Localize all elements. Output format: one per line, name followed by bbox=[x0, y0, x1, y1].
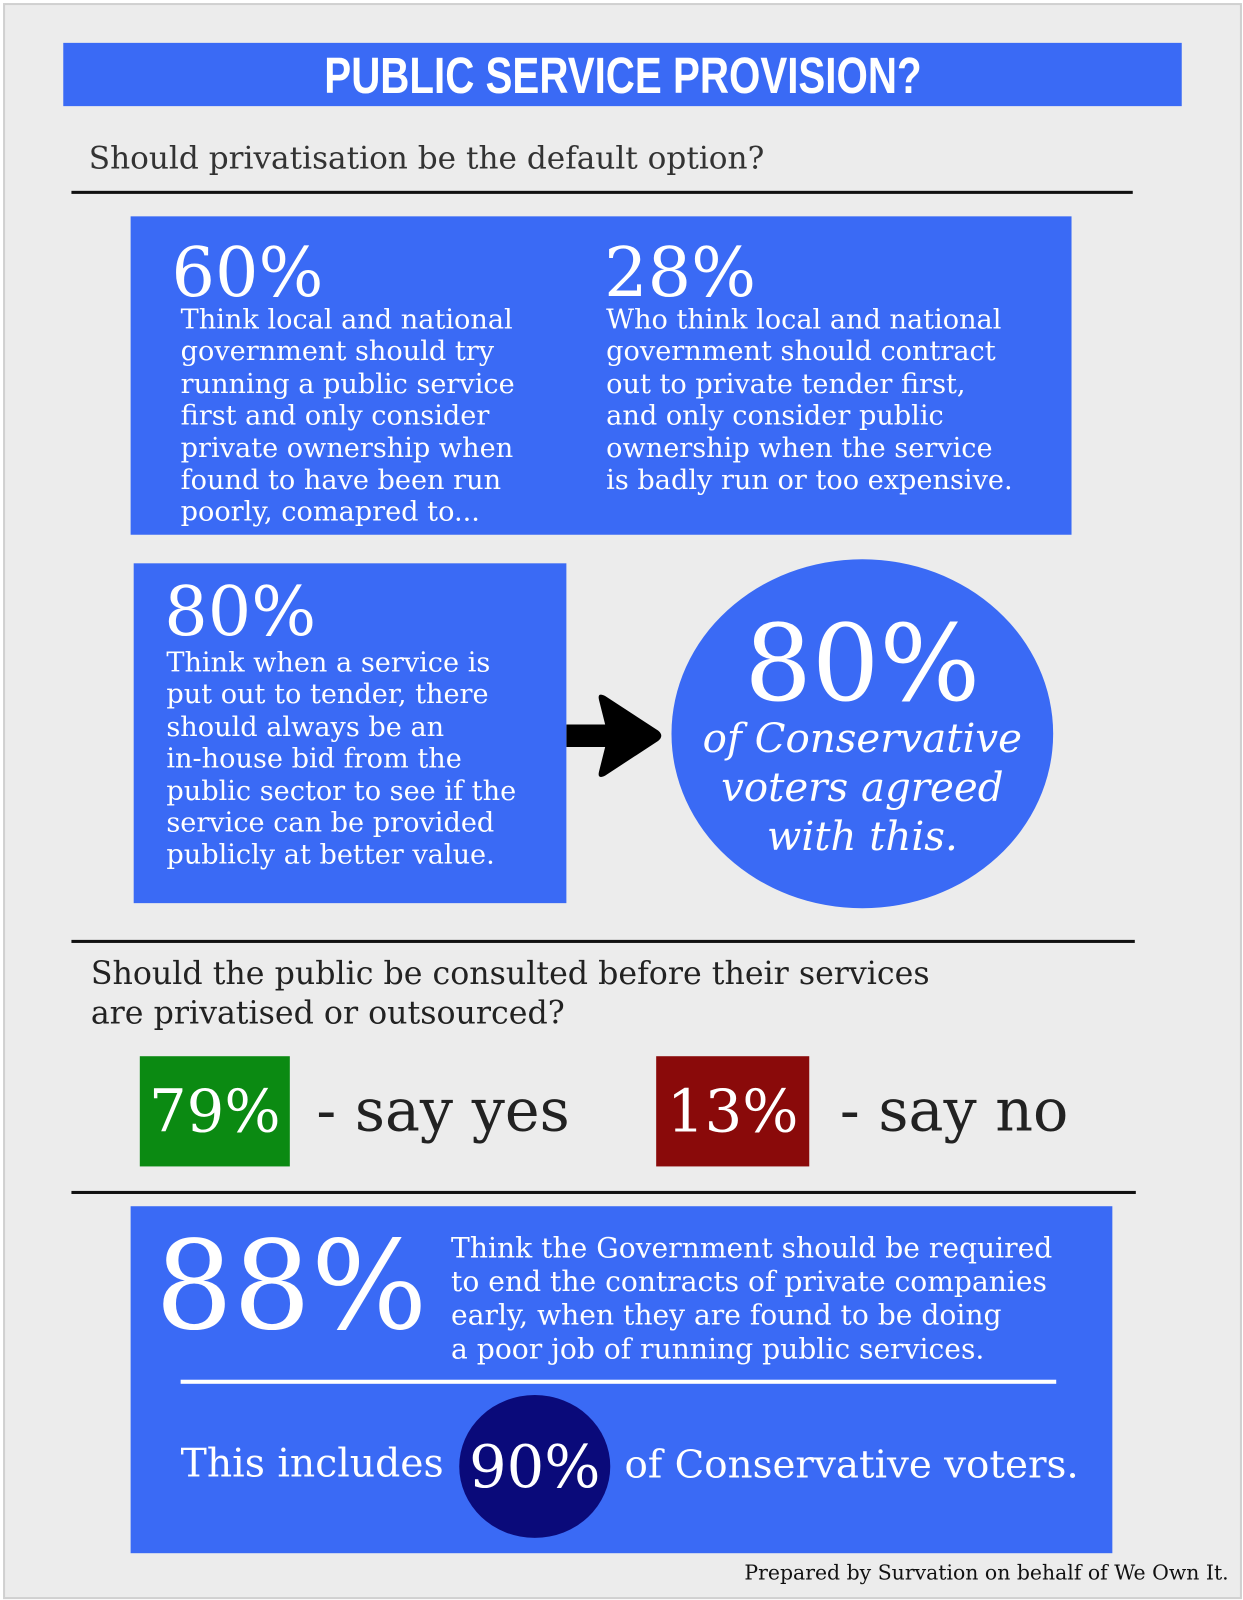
conservative voters line: of Conservative voters. bbox=[625, 1442, 1079, 1487]
stat 60%: first and only consider bbox=[181, 400, 489, 432]
panel: 80% in-house bid: in-house bid from the bbox=[166, 743, 462, 775]
stat 60%: 60% bbox=[171, 233, 323, 312]
stat 60%: private ownership when bbox=[181, 432, 513, 464]
stat: 13% no: - say no bbox=[840, 1077, 1068, 1145]
arrow bbox=[566, 694, 662, 777]
stat: 13% no bbox=[656, 1056, 1068, 1166]
panel: 80% in-house bid: put out to tender, there bbox=[166, 679, 489, 711]
stat 28%: and only consider public bbox=[606, 400, 944, 432]
panel: 80% in-house bid: service can be provided bbox=[166, 807, 494, 839]
stat: 79% yes bbox=[140, 1056, 570, 1166]
circle: 80% conservative: 80% bbox=[744, 601, 980, 726]
subheading: consultation: are privatised or outsourced? bbox=[91, 995, 565, 1032]
stat: 79% yes: - say yes bbox=[316, 1077, 570, 1145]
circle: 90%: 90% bbox=[469, 1432, 601, 1501]
stat 60%: found to have been run bbox=[181, 464, 501, 496]
stat 60%: government should try bbox=[181, 336, 494, 368]
panel: 80% in-house bid: 80% bbox=[164, 571, 316, 651]
panel: 80% in-house bid: Think when a service is bbox=[166, 647, 490, 679]
text 88%: to end the contracts of private companies bbox=[451, 1264, 1047, 1298]
panel: 80% in-house bid: should always be an bbox=[166, 711, 444, 743]
panel: 60% vs 28% bbox=[131, 216, 1072, 535]
stat 28%: ownership when the service bbox=[606, 432, 993, 464]
stat 60%: poorly, comapred to... bbox=[181, 496, 480, 528]
circle: 80% conservative: of Conservative bbox=[703, 715, 1022, 762]
stat 28%: government should contract bbox=[606, 336, 996, 368]
text 88% bbox=[451, 1231, 1052, 1365]
circle: 80% conservative bbox=[671, 559, 1053, 908]
conservative voters line bbox=[181, 1395, 1079, 1538]
panel: 80% in-house bid: public sector to see if the bbox=[166, 775, 516, 807]
stat: 79% yes: 79% bbox=[149, 1077, 281, 1146]
stat: 13% no: 13% bbox=[667, 1077, 798, 1146]
subheading: consultation: Should the public be consulted before their services bbox=[91, 955, 930, 992]
stat 28%: is badly run or too expensive. bbox=[606, 464, 1013, 496]
circle: 80% conservative: with this. bbox=[767, 813, 958, 860]
title: PUBLIC SERVICE PROVISION? bbox=[324, 47, 921, 104]
stat 60%: running a public service bbox=[181, 368, 515, 400]
subheading: consultation bbox=[91, 955, 930, 1032]
stat 60% bbox=[171, 233, 515, 528]
panel: 80% in-house bid: publicly at better value. bbox=[166, 839, 495, 871]
stat 28%: out to private tender first, bbox=[606, 368, 966, 400]
panel: 80% in-house bid bbox=[134, 563, 566, 903]
conservative voters line: This includes bbox=[181, 1441, 444, 1487]
footer credit: Prepared by Survation on behalf of We Own It. bbox=[744, 1560, 1229, 1585]
stat 28% bbox=[604, 233, 1013, 496]
circle: 80% conservative: voters agreed bbox=[721, 764, 1004, 811]
title bbox=[63, 43, 1182, 106]
circle: 90% bbox=[459, 1395, 610, 1538]
text 88%: a poor job of running public services. bbox=[451, 1332, 984, 1365]
stat 28%: 28% bbox=[604, 233, 756, 312]
subheading: privatisation: Should privatisation be the default option? bbox=[89, 141, 764, 177]
stat 28%: Who think local and national bbox=[606, 304, 1001, 336]
text 88%: early, when they are found to be doing bbox=[451, 1298, 1002, 1332]
stat 60%: Think local and national bbox=[181, 304, 513, 336]
panel: 88% end contracts bbox=[131, 1206, 1112, 1553]
text 88%: Think the Government should be required bbox=[451, 1231, 1052, 1264]
stat 88%: 88% bbox=[155, 1216, 427, 1358]
